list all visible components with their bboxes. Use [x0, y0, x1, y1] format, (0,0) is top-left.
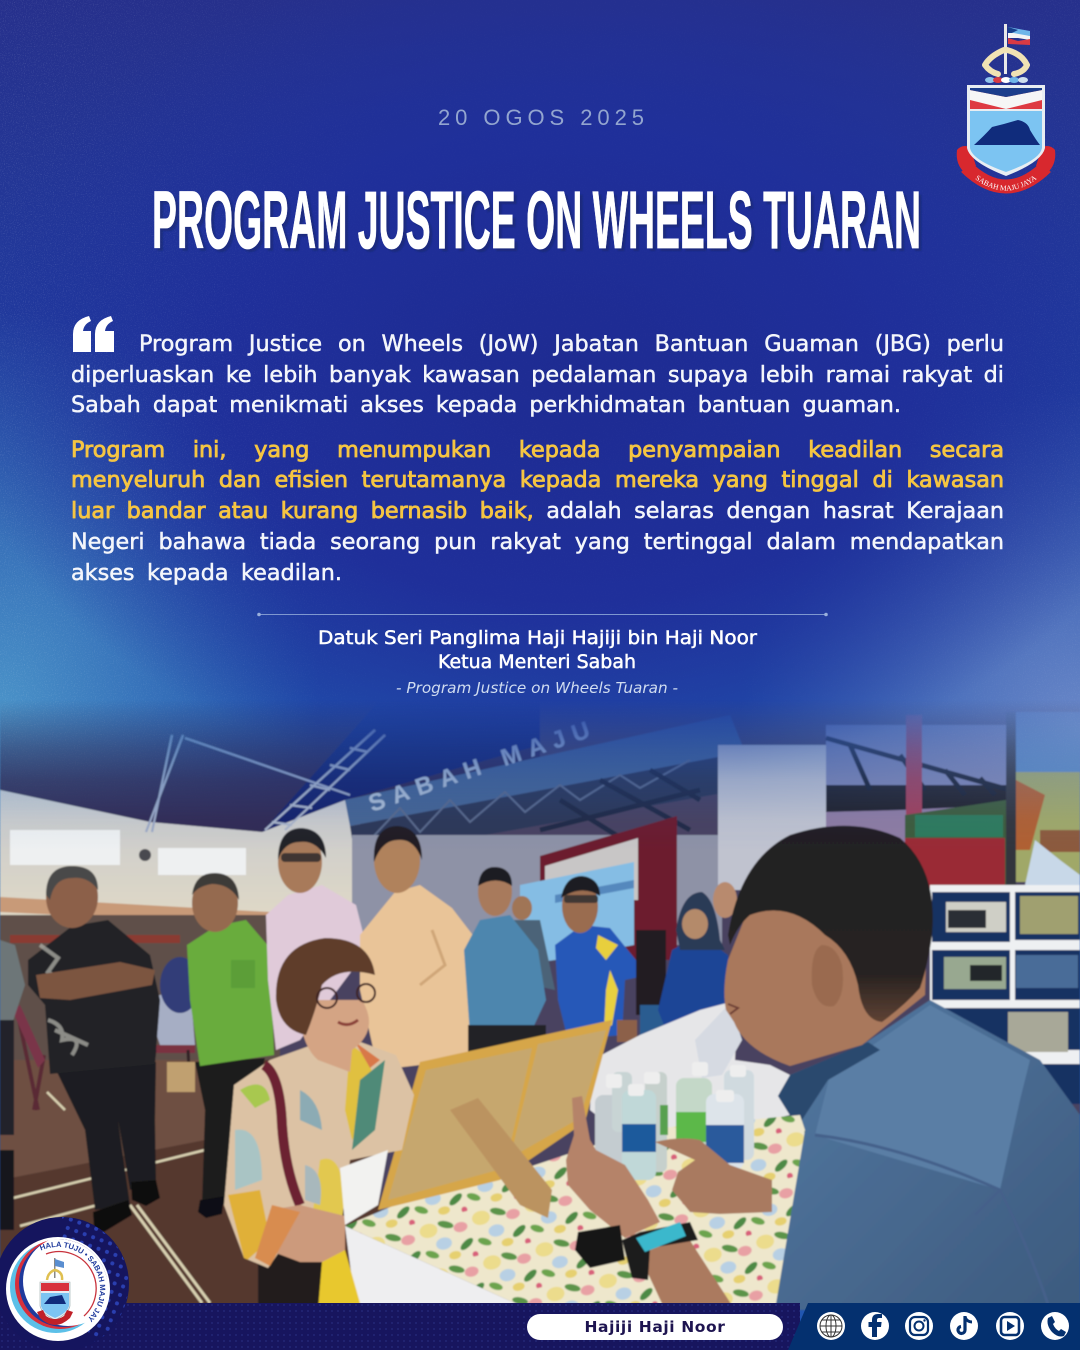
display boards: [928, 884, 1080, 1066]
attribution: - Program Justice on Wheels Tuaran -: [396, 679, 678, 697]
attribution: Datuk Seri Panglima Haji Hajiji bin Haji Noor: [318, 627, 757, 649]
icons: social links: [817, 1312, 1069, 1340]
seated woman: [258, 1254, 322, 1303]
quote paragraph 2: Negeri bahawa tiada seorang pun rakyat yang tertinggal dalam mendapatkan: [71, 529, 1004, 555]
attribution: Ketua Menteri Sabah: [438, 651, 636, 673]
icon: tiktok: [950, 1312, 978, 1340]
icon: ribbon: [956, 146, 1056, 194]
icon: instagram: [905, 1312, 933, 1340]
stage backdrop screen: [826, 806, 954, 843]
mini crest: [37, 1258, 73, 1325]
background speckle: [0, 0, 1080, 846]
quote paragraph 1: Sabah dapat menikmati akses kepada perkhidmatan bantuan guaman.: [71, 392, 901, 418]
icon: beads: [985, 77, 1028, 83]
quote paragraph 2: [71, 437, 1004, 586]
woman: hijab uniform: [636, 930, 666, 1015]
quote paragraph 2: menyeluruh dan efisien terutamanya kepada mereka yang tinggal di kawasan: [71, 467, 1004, 493]
side wall windows: [10, 830, 120, 865]
attribution: [318, 627, 758, 697]
footer bar: [0, 1303, 1080, 1350]
man far left edge: [0, 940, 25, 1030]
icon: ribbon: SABAH MAJU JAYA: [976, 176, 1037, 191]
foreground man: shirt: [770, 1000, 1080, 1310]
icon: shield: [967, 85, 1045, 176]
date: 20 OGOS 2025: [438, 105, 644, 130]
papers on table: [588, 1002, 791, 1128]
quote paragraph 1: [71, 331, 1004, 418]
pill: name: [527, 1314, 783, 1340]
foreground man: face and head: [723, 909, 927, 1067]
quote paragraph 2: luar bandar atau kurang bernasib baik, adalah selaras dengan hasrat Kerajaan: [71, 498, 1004, 524]
man: peach shirt: [358, 884, 473, 1068]
quote paragraph 1: diperluaskan ke lebih banyak kawasan pedalaman supaya lebih ramai rakyat di: [71, 362, 1004, 388]
foreground man: hands and forearm: [566, 1096, 660, 1238]
icon: phone: [1041, 1312, 1069, 1340]
man: blue uniform: [554, 925, 638, 1038]
pill: name: Hajiji Haji Noor: [584, 1318, 726, 1336]
icon: web globe: [817, 1312, 845, 1340]
icon: youtube: [996, 1312, 1024, 1340]
badge: Hala Tuju Sabah Maju Jaya: [0, 1217, 129, 1348]
wooden floor: [0, 1060, 380, 1310]
hall back wall and ceiling: [279, 708, 1080, 1212]
icon: quotation mark: [73, 316, 114, 352]
photo: event hall scene: [0, 706, 1080, 1310]
quote paragraph 2: akses kepada keadilan.: [71, 560, 342, 586]
man: green shirt: [195, 1058, 265, 1205]
quote paragraph 1: Program Justice on Wheels (JoW) Jabatan Bantuan Guaman (JBG) perlu: [139, 331, 1004, 357]
table cloth: [345, 1115, 805, 1310]
backdrop banner: [520, 862, 634, 965]
icon: flag: [1004, 24, 1030, 74]
crest: Sabah coat of arms: [956, 24, 1056, 194]
man: pink shirt: [266, 885, 366, 1050]
man: black batik shirt: [55, 1062, 156, 1210]
quote paragraph 2: Program ini, yang menumpukan kepada penyampaian keadilan secara: [71, 437, 1004, 463]
photo frame on table: [378, 1020, 612, 1210]
icon: facebook: [861, 1312, 889, 1340]
chairs and seated guest: [18, 1015, 44, 1110]
water bottles: [595, 1062, 754, 1180]
icon: arms holding pole: [985, 50, 1027, 74]
men behind in blue: [512, 896, 532, 920]
photo: event hall scene: SABAH MAJU: [365, 714, 601, 818]
divider: [257, 612, 828, 616]
